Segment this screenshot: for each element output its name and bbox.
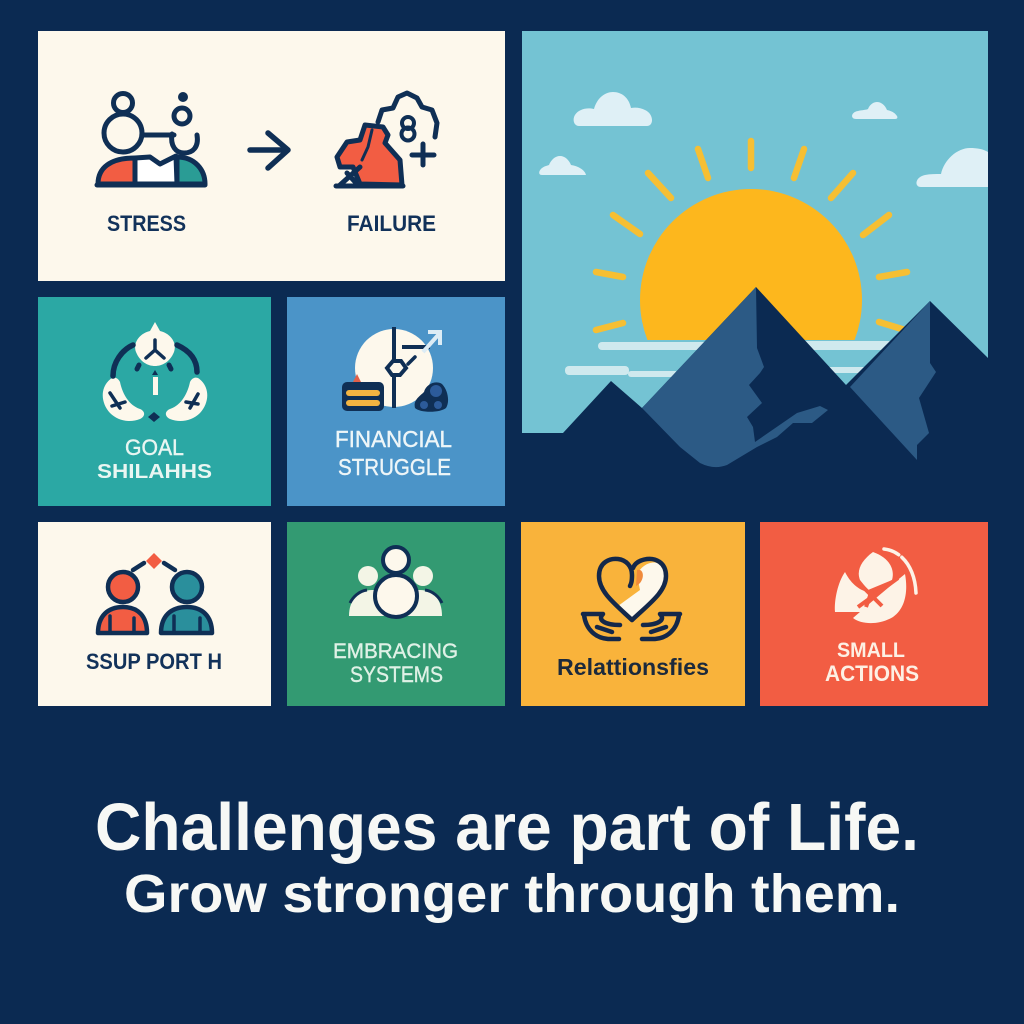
icon: heart and hands [583,559,680,639]
panel: small actions [760,522,988,706]
panel: embracing systems [287,522,505,706]
panel: support [38,522,271,706]
icon: support people [98,553,212,633]
icon: leaves [835,549,916,623]
label: stress: STRESS [107,211,186,236]
icon: stress people [97,94,205,185]
right mountain lit face [850,301,936,460]
icon: group [349,547,442,617]
label: goal: GOAL [125,435,184,460]
label: actions: ACTIONS [825,661,919,686]
sun [640,189,862,340]
label: support: SSUP PORT H [86,649,222,674]
label: relationships: Relattionsfies [557,654,709,680]
clouds [539,92,988,187]
label: systems: SYSTEMS [350,662,443,687]
big mountain lit face [642,287,828,467]
title line one: Challenges are part of Life. [95,790,919,865]
panel: goal [38,297,271,506]
icon: failure rock [336,93,437,186]
label: financial: FINANCIAL [335,426,452,452]
icon: goal circle [103,322,207,422]
label: struggle: STRUGGLE [338,454,451,480]
label: goal second line: SHILAHHS [97,461,212,483]
title [95,790,919,924]
horizon streaks [565,341,892,377]
panel: financial struggle [287,297,505,506]
sun rays [596,141,907,330]
mountains [522,287,988,520]
arrow: stress to failure [250,133,288,168]
label: small: SMALL [837,639,905,662]
panel: stress to failure [38,31,505,281]
title line two: Grow stronger through them. [124,864,900,924]
panel: relationships [521,522,745,706]
icon: financial [342,327,448,412]
label: embracing: EMBRACING [333,640,458,663]
label: failure: FAILURE [347,211,436,236]
panel: sky illustration [522,31,988,433]
